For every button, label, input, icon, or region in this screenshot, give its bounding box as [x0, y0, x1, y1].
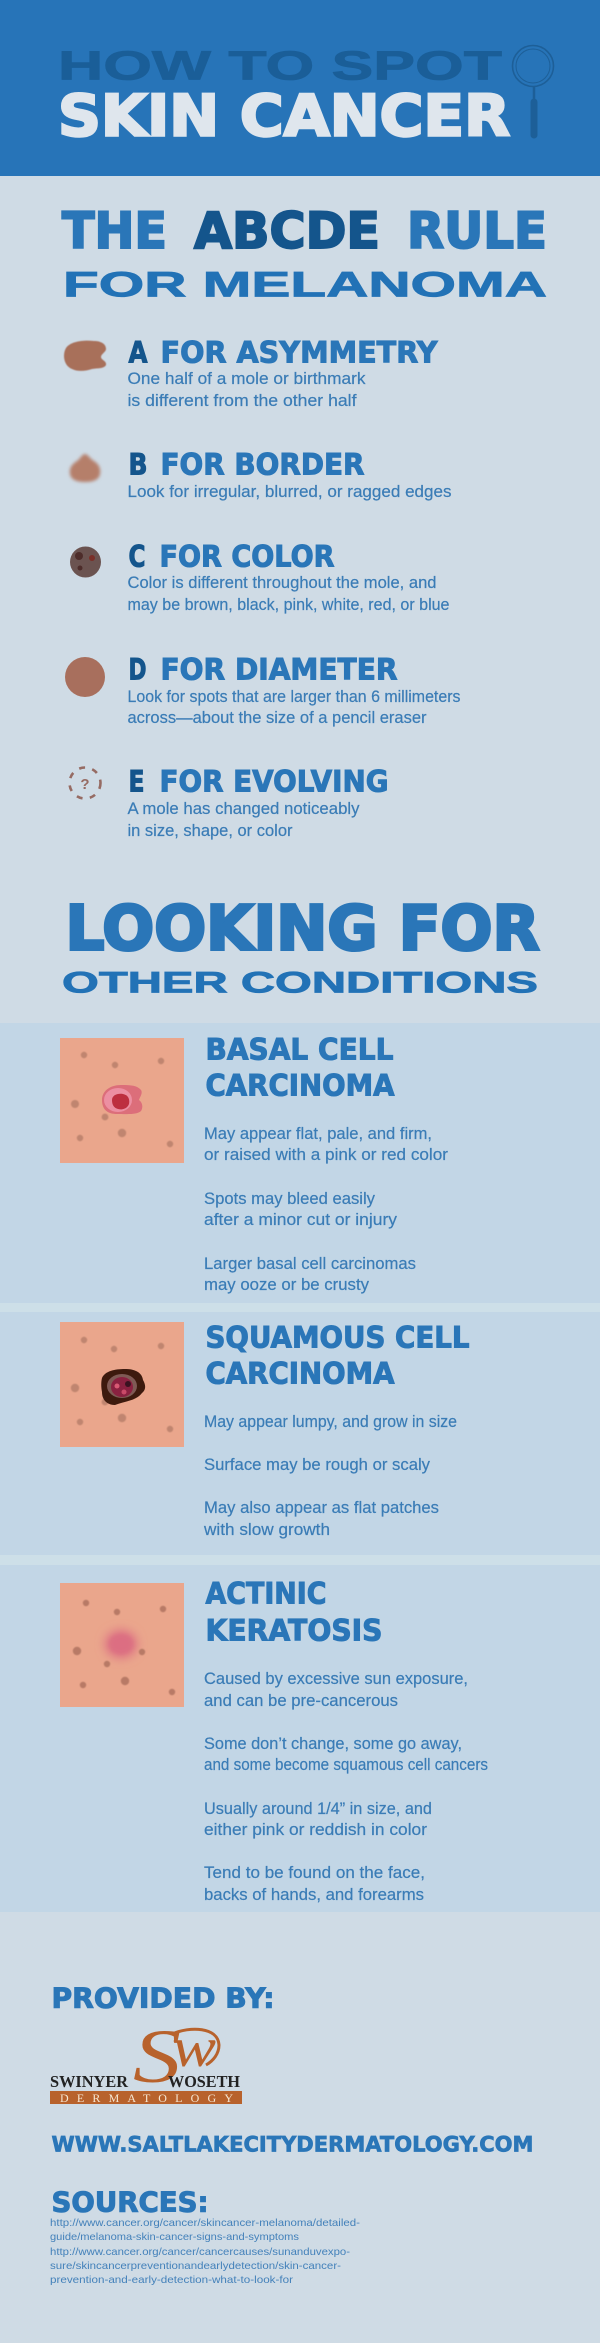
heading [206, 1320, 470, 1390]
heading: KERATOSIS [206, 1614, 382, 1648]
heading: looking for: LOOKING FOR [66, 892, 540, 964]
logo: Swinyer Woseth Dermatology: DERMATOLOGY [60, 2091, 233, 2105]
header banner [0, 0, 600, 176]
description: A mole has changed noticeably [128, 800, 360, 818]
heading: C [128, 540, 146, 574]
sources list: http://www.cancer.org/cancer/cancercauses/sunanduvexpo- [50, 2246, 351, 2258]
description: Look for spots that are larger than 6 millimeters [128, 688, 460, 706]
description [203, 1413, 457, 1539]
sources list: prevention-and-early-detection-what-to-look-for [50, 2274, 294, 2286]
description: is different from the other half [128, 392, 357, 410]
logo: Swinyer Woseth Dermatology: w [172, 2017, 216, 2079]
description: after a minor cut or injury [204, 1211, 398, 1229]
description: may be brown, black, pink, white, red, or blue [128, 596, 450, 614]
description: Look for irregular, blurred, or ragged edges [128, 483, 452, 501]
heading [206, 1032, 395, 1102]
subheading: other conditions: OTHER CONDITIONS [62, 967, 538, 1000]
icon: dashed circle with question mark [70, 768, 100, 798]
item: E for evolving [70, 764, 388, 840]
description: and some become squamous cell cancers [204, 1756, 488, 1774]
website url: WWW.SALTLAKECITYDERMATOLOGY.COM [52, 2133, 534, 2157]
description: and can be pre-cancerous [204, 1692, 398, 1710]
sources list: sure/skincancerpreventionandearlydetection/skin-cancer- [50, 2260, 342, 2272]
separator band [0, 1555, 600, 1565]
description: across—about the size of a pencil eraser [128, 709, 427, 727]
heading: A [128, 336, 148, 370]
logo: Swinyer Woseth Dermatology: S [133, 2015, 181, 2099]
description: May appear lumpy, and grow in size [204, 1413, 457, 1431]
description: Surface may be rough or scaly [204, 1456, 431, 1474]
heading: FOR BORDER [160, 448, 364, 482]
sources list: http://www.cancer.org/cancer/skincancer-melanoma/detailed- [50, 2217, 361, 2229]
description: in size, shape, or color [128, 822, 293, 840]
description [128, 800, 360, 840]
panel: squamous cell carcinoma [0, 1312, 600, 1555]
logo: Swinyer Woseth Dermatology [50, 2015, 242, 2105]
heading: CARCINOMA [206, 1356, 395, 1390]
item: A for asymmetry [64, 336, 438, 410]
heading: FOR ASYMMETRY [160, 336, 438, 370]
skin illustration with lesion [60, 1038, 184, 1163]
heading: sources: SOURCES: [52, 2186, 208, 2218]
subheading: for melanoma: FOR MELANOMA [63, 265, 547, 305]
heading: FOR DIAMETER [160, 652, 398, 686]
heading: provided by: PROVIDED BY: [52, 1982, 274, 2014]
description: Color is different throughout the mole, and [128, 574, 436, 592]
heading: D [128, 652, 146, 686]
description: backs of hands, and forearms [204, 1886, 424, 1904]
description: Tend to be found on the face, [204, 1864, 425, 1882]
description: May also appear as flat patches [204, 1499, 439, 1517]
description: Larger basal cell carcinomas [204, 1255, 416, 1273]
sources list: guide/melanoma-skin-cancer-signs-and-symptoms [50, 2231, 299, 2243]
logo: Swinyer Woseth Dermatology: SWINYER [50, 2072, 129, 2091]
title line 1: HOW TO SPOT [58, 43, 502, 89]
title line 2: SKIN CANCER [58, 84, 510, 150]
description: may ooze or be crusty [204, 1276, 370, 1294]
heading: FOR COLOR [160, 540, 334, 574]
icon: magnifying glass [512, 46, 554, 135]
description: May appear flat, pale, and firm, [204, 1125, 432, 1143]
panel: actinic keratosis [0, 1565, 600, 1912]
description: Caused by excessive sun exposure, [204, 1670, 468, 1688]
heading: the ABCDE rule: THE [62, 202, 167, 260]
heading: B [128, 448, 148, 482]
heading: ACTINIC [206, 1576, 326, 1610]
description: One half of a mole or birthmark [128, 370, 366, 388]
heading: FOR EVOLVING [160, 764, 388, 798]
icon: dashed circle with question mark: ? [80, 776, 90, 793]
description [128, 370, 366, 410]
logo: Swinyer Woseth Dermatology: WOSETH [168, 2072, 240, 2091]
skin illustration with lesion [60, 1583, 184, 1707]
item: C for color [70, 540, 450, 614]
description: or raised with a pink or red color [204, 1146, 449, 1164]
description [204, 1670, 488, 1904]
heading: E [128, 764, 144, 798]
description: either pink or reddish in color [204, 1821, 428, 1839]
icon: asymmetric mole [64, 341, 106, 371]
item: B for border [70, 448, 451, 501]
description: Usually around 1/4” in size, and [204, 1800, 432, 1818]
icon: large round mole [65, 657, 105, 697]
panel: basal cell carcinoma [0, 1023, 600, 1303]
heading: SQUAMOUS CELL [206, 1320, 470, 1354]
description: Some don’t change, some go away, [204, 1735, 462, 1753]
separator band [0, 1303, 600, 1312]
description: with slow growth [203, 1521, 330, 1539]
description [128, 688, 460, 727]
description [128, 574, 450, 614]
heading: BASAL CELL [206, 1032, 394, 1066]
description: Spots may bleed easily [204, 1190, 376, 1208]
description [204, 1125, 449, 1294]
icon: multicolor mole [70, 546, 101, 578]
heading: CARCINOMA [206, 1068, 395, 1102]
skin illustration with lesion [60, 1322, 184, 1447]
heading [206, 1576, 382, 1648]
icon: blurred mole [70, 454, 100, 482]
heading: the ABCDE rule: ABCDE [194, 202, 380, 260]
heading: the ABCDE rule [62, 202, 547, 260]
heading: the ABCDE rule: RULE [407, 202, 547, 260]
item: D for diameter [65, 652, 460, 727]
sources list [50, 2217, 361, 2286]
